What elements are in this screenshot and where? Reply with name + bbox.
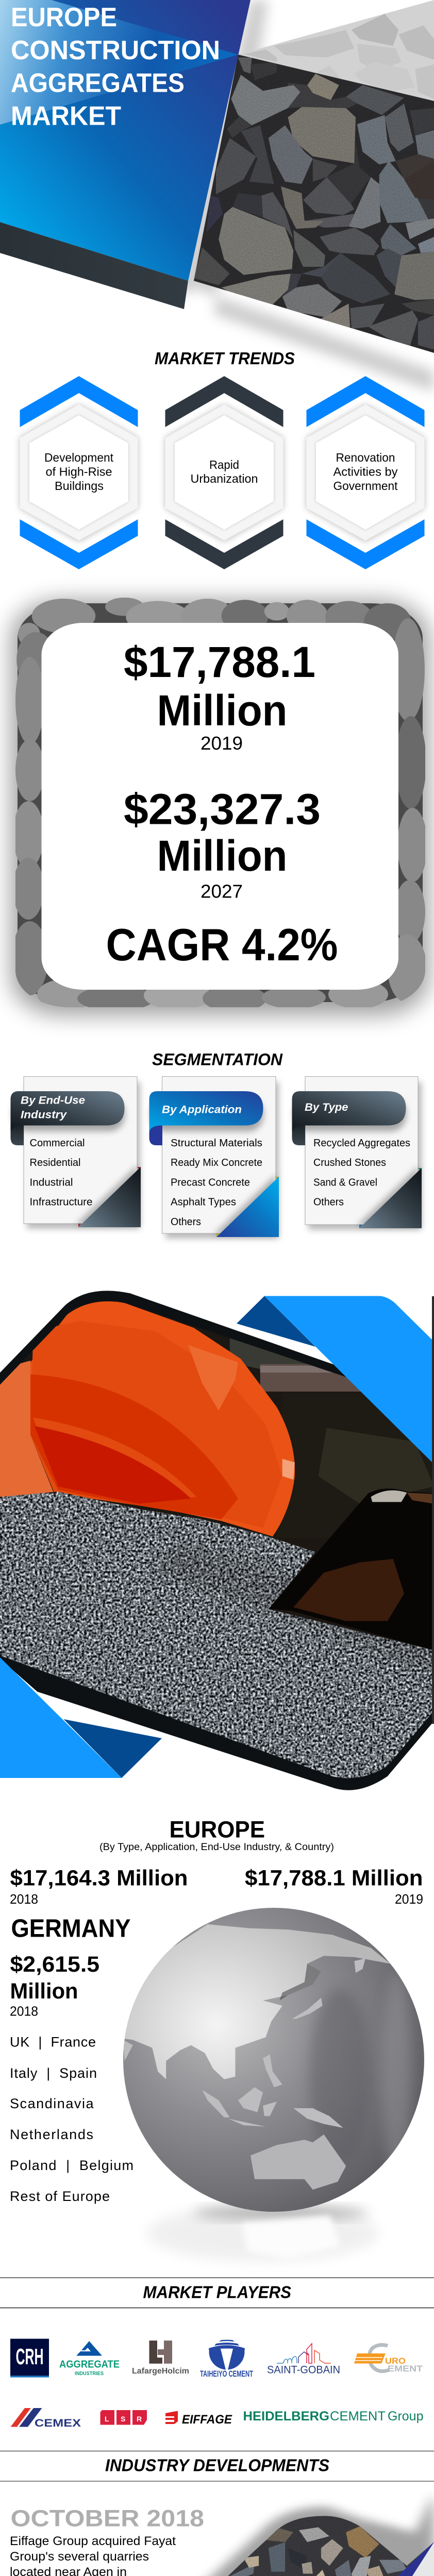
- continent: asia: [123, 1924, 390, 2079]
- value 2019: 2019: [201, 733, 243, 754]
- heading: europe: EUROPE: [169, 1817, 265, 1842]
- islands: [123, 1958, 365, 2128]
- logo: Eiffage: EIFFAGE: [182, 2413, 232, 2427]
- hero translucent stones: [238, 0, 434, 103]
- logo: Euro Cement: URO: [385, 2356, 406, 2366]
- logo: CRH: [10, 2339, 49, 2377]
- gravel photo: [228, 2516, 434, 2576]
- logo: LafargeHolcim: LafargeHolcim: [132, 2367, 189, 2376]
- germany block: GERMANY: [11, 1914, 131, 1942]
- header pill: [149, 1091, 263, 1145]
- logo: Taiheiyo Cement: [200, 2340, 253, 2377]
- white value card: [41, 623, 398, 990]
- aggregate pile: [0, 1492, 432, 1778]
- logo: Euro Cement: EMENT: [388, 2364, 423, 2374]
- list: [313, 1138, 410, 1208]
- country list: Poland | Belgium: [10, 2158, 133, 2173]
- value 2027: $23,327.3: [124, 785, 321, 834]
- header pill: Industry: [21, 1109, 67, 1121]
- header pill: [10, 1091, 125, 1145]
- list: Commercial: [30, 1138, 85, 1149]
- logo: CRH: CRH: [15, 2344, 43, 2369]
- hero rock photo: [191, 52, 434, 361]
- hexagon 3: Renovation: [336, 451, 395, 464]
- light blue accent bottom: [0, 1657, 122, 1778]
- list: Others: [171, 1216, 201, 1228]
- development october 2018: [10, 2505, 204, 2576]
- germany block: [10, 1914, 131, 2019]
- value 2018: $17,164.3 Million: [10, 1866, 188, 1891]
- list: Residential: [30, 1157, 80, 1168]
- value 2019: $17,788.1: [124, 638, 315, 686]
- logo: Euro Cement: [354, 2345, 423, 2374]
- country list: Netherlands: [10, 2127, 93, 2142]
- value 2027: [124, 785, 321, 902]
- value 2027: 2027: [201, 881, 243, 902]
- logo: Eiffage: [165, 2411, 232, 2427]
- logo: HeidelbergCement: HEIDELBERG: [243, 2409, 329, 2424]
- corner fold: [356, 1166, 422, 1228]
- header pill: By Application: [162, 1104, 242, 1116]
- panel: market players: [0, 2278, 434, 2429]
- header pill: By End-Use: [21, 1094, 85, 1107]
- logo: Cemex: CEMEX: [35, 2417, 81, 2429]
- globe reflection: [147, 2205, 379, 2262]
- title: MARKET: [11, 101, 121, 131]
- logo: Cemex: [10, 2408, 81, 2429]
- photo: aggregates and bucket: [0, 1288, 434, 1803]
- corner fold: [213, 1175, 279, 1237]
- list: [30, 1138, 93, 1208]
- dark blue accents: [64, 1296, 315, 1778]
- title: CONSTRUCTION: [11, 36, 220, 65]
- country list: Italy | Spain: [10, 2065, 97, 2081]
- germany block: Million: [10, 1979, 78, 2004]
- value 2018: 2018: [10, 1891, 38, 1907]
- heading: segmentation: SEGMENTATION: [152, 1050, 283, 1069]
- hexagon 1: Development: [44, 451, 114, 464]
- list: Others: [313, 1196, 344, 1208]
- list: [171, 1138, 262, 1228]
- list: Recycled Aggregates: [313, 1138, 410, 1149]
- development october 2018: Group's several quarries: [10, 2550, 149, 2564]
- development october 2018: Eiffage Group acquired Fayat: [10, 2534, 176, 2548]
- heading: industry developments: INDUSTRY DEVELOPMENTS: [105, 2455, 329, 2475]
- panel: europe: [10, 1817, 424, 2262]
- list: Crushed Stones: [313, 1157, 386, 1168]
- CAGR: CAGR 4.2%: [106, 919, 338, 970]
- list: Asphalt Types: [171, 1196, 236, 1208]
- value 2019: 2019: [395, 1891, 423, 1907]
- title: AGGREGATES: [11, 68, 185, 98]
- country list: Rest of Europe: [10, 2189, 110, 2204]
- globe: [123, 1908, 424, 2212]
- hexagon 3: Government: [333, 479, 398, 493]
- logo: Aggregate Industries: INDUSTRIES: [75, 2371, 104, 2377]
- hexagon 1: of High-Rise: [45, 465, 112, 478]
- value 2019: $17,788.1 Million: [245, 1866, 423, 1891]
- hero header: [0, 0, 434, 392]
- black frame: [0, 1291, 434, 1790]
- list: Industrial: [30, 1177, 73, 1188]
- logo: Saint-Gobain: SAINT-GOBAIN: [267, 2364, 340, 2376]
- hexagon 1: [20, 376, 138, 569]
- hexagon 2: Urbanization: [191, 472, 258, 485]
- shovel: [269, 1488, 434, 1650]
- subheading: (By Type, Application, End-Use Industry, & Country): [99, 1842, 334, 1853]
- country list: UK | France: [10, 2034, 96, 2049]
- logo: Saint-Gobain: [267, 2344, 340, 2376]
- photo contents: [0, 1288, 434, 1803]
- blob shadow: [176, 2493, 434, 2576]
- hero shadow: [175, 0, 434, 392]
- stone frame: [12, 598, 427, 1012]
- logo: LSR: L: [105, 2415, 109, 2423]
- header pill: By Type: [305, 1101, 348, 1113]
- hexagon 1: Buildings: [55, 479, 104, 493]
- logo: HeidelbergCement: [243, 2409, 424, 2424]
- hero light facet: [0, 0, 238, 125]
- logo: HeidelbergCement: Group: [388, 2409, 424, 2424]
- development october 2018: OCTOBER 2018: [10, 2505, 204, 2532]
- germany block: $2,615.5: [10, 1952, 99, 1977]
- panel: market size stone frame: [11, 598, 429, 1015]
- country list: Scandinavia: [10, 2096, 94, 2111]
- logo: LSR: [100, 2410, 147, 2425]
- list: Structural Materials: [171, 1138, 262, 1149]
- value 2027: Million: [157, 832, 288, 880]
- heading: market trends: MARKET TRENDS: [155, 349, 295, 368]
- germany block: 2018: [10, 2003, 38, 2019]
- hero blue panel: [0, 0, 251, 281]
- hexagon 3: [306, 376, 425, 569]
- heading: market players: MARKET PLAYERS: [143, 2282, 291, 2302]
- panel: by end-use industry: [10, 1077, 141, 1229]
- right grey panel: [410, 2542, 434, 2576]
- list: Precast Concrete: [171, 1177, 250, 1188]
- value 2018: [10, 1866, 188, 1907]
- value 2019: Million: [157, 686, 288, 735]
- frame shadow: [11, 600, 429, 1015]
- blue wave: [340, 2542, 434, 2576]
- header pill: [292, 1091, 406, 1145]
- title: [11, 3, 220, 131]
- list: Ready Mix Concrete: [171, 1157, 262, 1168]
- hero dark bar: [0, 222, 188, 309]
- country list: [10, 2034, 133, 2204]
- corner fold: [75, 1165, 141, 1227]
- logo: LSR: S: [121, 2415, 125, 2423]
- logo: HeidelbergCement: CEMENT: [330, 2409, 386, 2424]
- logo: Aggregate Industries: AGGREGATE: [59, 2359, 120, 2370]
- logo: LafargeHolcim: [132, 2341, 189, 2376]
- hexagon 3: Activities by: [333, 465, 398, 478]
- value 2019: [124, 638, 315, 754]
- value 2019: [245, 1866, 423, 1907]
- logo: Aggregate Industries: [59, 2341, 120, 2377]
- hexagon 2: Rapid: [209, 458, 239, 471]
- logo: LSR: R: [137, 2415, 142, 2423]
- continent: australia: [251, 2134, 346, 2190]
- panel: by application: [149, 1077, 279, 1239]
- right edge sliver: [432, 1296, 434, 1724]
- panel: market trends hexagons: [20, 376, 425, 569]
- panel: industry developments: [0, 2451, 434, 2576]
- logo: Taiheiyo Cement: TAIHEIYO CEMENT: [200, 2369, 253, 2379]
- list: Infrastructure: [30, 1196, 93, 1208]
- list: Sand & Gravel: [313, 1177, 377, 1188]
- hexagon 2: [165, 376, 283, 569]
- light blue accent top: [264, 1296, 432, 1462]
- dark blue wave top: [370, 2542, 434, 2576]
- panel: by type: [292, 1077, 422, 1230]
- title: EUROPE: [11, 3, 117, 32]
